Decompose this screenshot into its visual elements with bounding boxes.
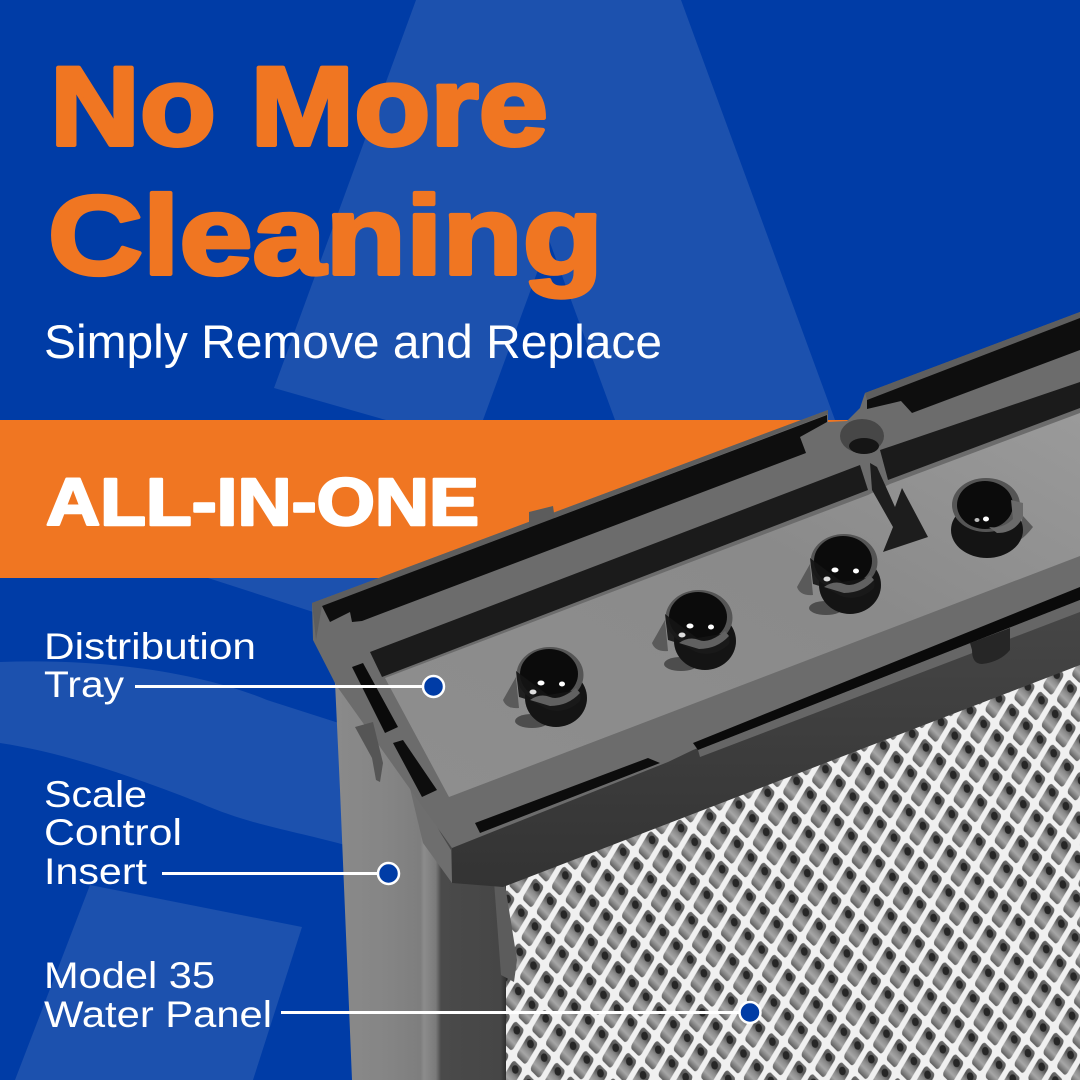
side clip	[355, 722, 383, 782]
title: Cleaning	[48, 173, 603, 298]
inner dark band left	[370, 465, 868, 677]
front face of tray	[452, 596, 1080, 887]
small tab on rim	[529, 506, 555, 529]
nozzle 1	[503, 647, 587, 728]
locating pin	[840, 419, 928, 552]
background shape: wedge under band	[208, 578, 400, 640]
front slit right	[693, 587, 1080, 750]
front lip highlight	[698, 600, 1080, 757]
title	[48, 44, 603, 298]
subtitle: Simply Remove and Replace	[44, 315, 662, 368]
side clip on post	[493, 868, 517, 982]
label: Scale Control Insert: Control	[44, 812, 182, 853]
side slot lower	[393, 740, 437, 797]
nozzle 2	[652, 590, 736, 671]
title: No More	[50, 44, 548, 169]
inner dark band right	[880, 382, 1080, 480]
bevel corner	[408, 780, 452, 883]
background shape: lower quadrilateral	[15, 885, 302, 1080]
label: Scale Control Insert: Insert	[44, 851, 148, 892]
band heading: ALL-IN-ONE	[46, 465, 479, 540]
mesh water panel	[500, 660, 1080, 1080]
rim highlights	[312, 312, 1080, 640]
distribution tray floor	[385, 413, 1080, 797]
label: Distribution Tray: Tray	[44, 664, 125, 705]
background shape: large letter A	[274, 0, 835, 420]
product: water panel assembly	[312, 312, 1080, 1080]
nozzle 3	[797, 534, 881, 615]
nozzle 4	[951, 478, 1033, 558]
notch cup on front face	[970, 628, 1010, 664]
upper slot right	[867, 318, 1080, 413]
front slot left	[475, 758, 660, 833]
label: Model 35 Water Panel	[44, 955, 760, 1035]
upper slot left	[322, 415, 827, 622]
side slot upper	[352, 663, 398, 733]
label: Model 35 Water Panel: Model 35	[44, 955, 215, 996]
left post	[335, 682, 506, 1080]
label: Distribution Tray	[44, 626, 444, 705]
label: Scale Control Insert	[44, 774, 399, 892]
background shape: curved band	[0, 661, 345, 845]
top surface of frame	[312, 312, 1080, 848]
label: Distribution Tray: Distribution	[44, 626, 256, 667]
label: Model 35 Water Panel: Water Panel	[44, 994, 272, 1035]
orange band	[0, 420, 860, 578]
label: Scale Control Insert: Scale	[44, 774, 147, 815]
